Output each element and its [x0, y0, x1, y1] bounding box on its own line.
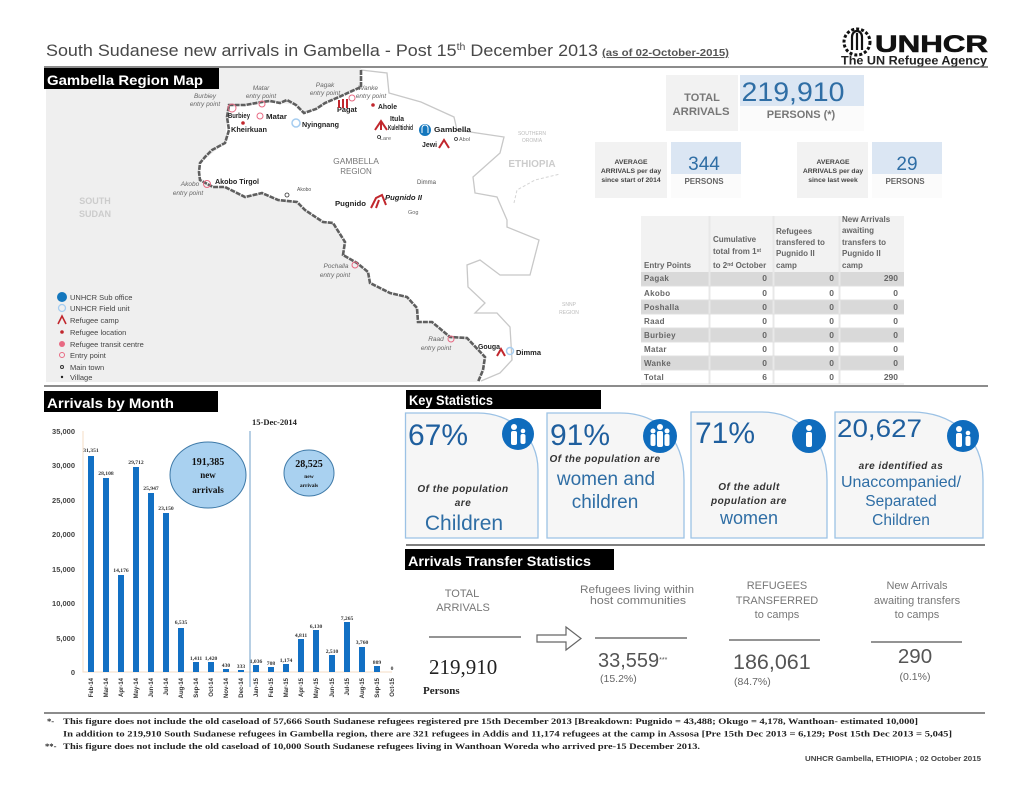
table: entry points: 0 — [829, 372, 834, 382]
transfer: total arrivals — [423, 588, 521, 697]
KPI: total arrivals — [666, 75, 864, 131]
bar chart: arrivals by month: 0 — [391, 666, 394, 672]
bar chart: arrivals by month: Oct-15 — [390, 677, 396, 697]
map legend — [57, 292, 144, 382]
stat card: 20,627 unaccompanied children: Unaccompanied/ — [841, 474, 962, 491]
bar chart: arrivals by month: 0 — [71, 668, 75, 677]
bar chart: arrivals by month: 1,036 — [250, 659, 262, 665]
transfer: new arrivals awaiting transfers: 290 — [898, 645, 932, 668]
map labels: entry point — [190, 101, 221, 108]
table: entry points: 0 — [762, 344, 767, 354]
bar chart: arrivals by month: 3,760 — [356, 640, 368, 646]
transfer: refugees transferred to camps — [729, 580, 820, 688]
bar chart: arrivals by month: 2,510 — [326, 649, 338, 655]
KPI: average arrivals since last week: AVERAGE — [816, 159, 850, 166]
bar chart: arrivals by month: 6,130 — [310, 624, 322, 630]
table: entry points: 0 — [829, 358, 834, 368]
table: entry points: Burbiey — [644, 331, 676, 340]
table: entry points: October — [733, 261, 766, 270]
bar chart: arrivals by month: May-15 — [314, 677, 320, 698]
table: entry points: 0 — [829, 273, 834, 283]
map labels: Akobo — [180, 181, 200, 188]
transfer: refugees transferred to camps: 186,061 — [733, 650, 811, 674]
stat card: 67% children: Of the population — [417, 484, 509, 495]
table: entry points: 0 — [893, 330, 898, 340]
KPI: total arrivals: PERSONS (*) — [767, 109, 836, 121]
stat card: 20,627 unaccompanied children: Separated — [865, 493, 937, 510]
map legend: Main town — [70, 363, 104, 372]
callout: 28,525 new arrivals: 28,525 — [295, 459, 323, 470]
map labels: OROMIA — [522, 138, 543, 144]
table: entry points: 0 — [893, 344, 898, 354]
bar chart: arrivals by month: May-14 — [134, 677, 140, 698]
map labels: Burbiey — [228, 111, 251, 120]
stat card: 71% women — [691, 412, 827, 538]
footnotes: **- — [45, 741, 57, 751]
bar chart: arrivals by month: Feb-15 — [269, 677, 275, 697]
map labels: Burbiey — [194, 93, 217, 100]
bar chart: arrivals by month: Jul-15 — [345, 677, 351, 695]
icon: family — [502, 418, 534, 450]
bar chart: arrivals by month: Jul-14 — [164, 677, 170, 695]
footnotes: *- — [47, 716, 54, 726]
KPI: total arrivals: TOTAL — [684, 92, 720, 104]
transfer: refugees transferred to camps: (84.7%) — [734, 676, 771, 688]
transfer: new arrivals awaiting transfers: awaiting transfers — [874, 595, 961, 607]
bar chart: arrivals by month: Sep-15 — [375, 677, 381, 698]
transfer: total arrivals: TOTAL — [445, 588, 479, 600]
table: entry points: Pagak — [644, 274, 669, 283]
stat card: 71% women: women — [719, 508, 778, 528]
table: entry points: transfers to — [842, 238, 886, 247]
credit line: UNHCR Gambella, ETHIOPIA ; 02 October 2015 — [805, 754, 981, 763]
table: entry points: 0 — [762, 330, 767, 340]
map labels — [79, 82, 579, 357]
table: entry points: Entry Points — [644, 261, 692, 270]
bar chart: arrivals by month: 29,712 — [128, 460, 144, 466]
map labels: entry point — [310, 90, 341, 97]
bar chart: arrivals by month: 7,265 — [341, 616, 353, 622]
bar chart: arrivals by month: Sep-14 — [194, 677, 200, 698]
bar chart: arrivals by month: 35,000 — [52, 427, 75, 436]
KPI: average arrivals since start of 2014: 344 — [688, 154, 720, 175]
transfer: refugees transferred to camps: to camps — [755, 609, 800, 621]
table: entry points: 0 — [893, 288, 898, 298]
KPI: average arrivals since start of 2014 — [595, 142, 741, 198]
map labels: Dimma — [516, 348, 542, 357]
bar chart: arrivals by month: 1,420 — [205, 656, 217, 662]
map labels: Wanke — [358, 85, 378, 92]
section heading: arrivals transfer statistics: Arrivals Transfer Statistics — [408, 553, 591, 569]
table: entry points: Poshalla — [644, 303, 680, 312]
section heading: arrivals by month: Arrivals by Month — [47, 395, 174, 411]
map labels: entry point — [421, 345, 452, 352]
table: entry points: 0 — [893, 316, 898, 326]
callout: 28,525 new arrivals: arrivals — [300, 483, 318, 489]
title — [46, 41, 729, 60]
transfer: refugees transferred to camps: TRANSFERRED — [736, 595, 818, 607]
map labels: Kheirkuan — [231, 125, 267, 134]
table: entry points: camp — [776, 261, 797, 270]
logo: UNHCR: The UN Refugee Agency — [841, 56, 988, 68]
map labels: Ahole — [378, 102, 397, 111]
table: entry points: Pugnido II — [842, 249, 881, 258]
bar chart: arrivals by month: Mar-15 — [284, 677, 290, 697]
map labels: entry point — [356, 93, 387, 100]
bar chart: arrivals by month: 4,811 — [295, 633, 307, 639]
international border — [199, 70, 485, 382]
KPI: average arrivals since start of 2014: ARRIVALS per day — [601, 168, 661, 175]
table: entry points: awaiting — [842, 226, 874, 235]
map labels: SNNP — [562, 302, 577, 308]
footnotes: This figure does not include the old caseload of 57,666 South Sudanese refugees registered pre 15th December 2013 [Breakdown: Pugnido = 43,488; Okugo = 4,178, Wanthoan- estimated 10,000] — [63, 716, 918, 726]
table: entry points: 0 — [762, 316, 767, 326]
stat card: 71% women: population are — [710, 496, 787, 507]
map labels: Raad — [428, 336, 444, 343]
bar chart: arrivals by month: 31,351 — [83, 448, 99, 454]
map labels: Gouga — [478, 342, 501, 351]
map labels: GAMBELLA — [333, 156, 379, 166]
bar chart: arrivals by month: 5,000 — [56, 634, 75, 643]
transfer: new arrivals awaiting transfers: New Arrivals — [886, 580, 948, 592]
stat card: 71% women: Of the adult — [718, 482, 780, 493]
bar chart: arrivals by month: Apr-14 — [119, 677, 125, 697]
map labels: Akobo — [297, 187, 311, 193]
bar chart: arrivals by month: 28,108 — [98, 471, 114, 477]
stat card: 67% children: are — [455, 498, 471, 509]
bar chart: arrivals by month: 15-Dec-2014 — [252, 417, 298, 427]
map legend: Refugee transit centre — [70, 340, 144, 349]
footnotes: In addition to 219,910 South Sudanese refugees in Gambella region, there are 321 refugees in Addis and 11,174 refugees at the camp in Assosa [Pre 15th Dec 2013 = 6,129; Post 15th Dec 2013 = 5,045] — [63, 728, 952, 738]
title: South Sudanese new arrivals in Gambella - Post 15 — [46, 41, 435, 60]
callout: 28,525 new arrivals — [284, 450, 334, 496]
map labels: Akobo Tirgol — [215, 177, 259, 186]
table: entry points: Raad — [644, 317, 665, 326]
table: entry points: camp — [842, 261, 863, 270]
bar chart: arrivals by month: Dec-14 — [239, 677, 245, 698]
arrow: transfer flow — [537, 627, 581, 650]
bar chart: arrivals by month: 10,000 — [52, 599, 75, 608]
Ethiopia regional outline — [361, 70, 539, 381]
map legend: Refugee camp — [70, 316, 119, 325]
icon: family group — [643, 419, 677, 453]
transfer: total arrivals: 219,910 — [429, 655, 497, 679]
bar chart: arrivals by month: Jan-15 — [254, 677, 260, 697]
map labels: SOUTH — [79, 196, 111, 206]
table: entry points: 0 — [829, 316, 834, 326]
bar chart: arrivals by month: Aug-14 — [179, 677, 185, 698]
stat card: 67% children: Children — [425, 512, 503, 535]
bar chart: arrivals by month — [52, 417, 396, 698]
table: entry points — [641, 215, 904, 384]
footnotes — [45, 716, 952, 751]
transfer: refugees transferred to camps: REFUGEES — [747, 580, 807, 592]
map labels: Pugnido — [335, 199, 366, 208]
transfer: new arrivals awaiting transfers: to camps — [895, 609, 940, 621]
callout: 191,385 new arrivals: arrivals — [192, 486, 224, 496]
map labels: SUDAN — [79, 209, 111, 219]
logo: UNHCR — [841, 29, 988, 68]
transfer: new arrivals awaiting transfers: (0.1%) — [900, 671, 930, 683]
transfer: total arrivals: Persons — [423, 685, 460, 697]
map labels: SOUTHERN — [518, 131, 546, 137]
map labels: Pugnido II — [385, 193, 423, 202]
map labels: entry point — [320, 272, 351, 279]
title: December 2013 — [465, 41, 598, 60]
section heading: map: Gambella Region Map — [47, 72, 203, 88]
bar chart: arrivals by month: 6,535 — [175, 620, 187, 626]
stat card: 91% women and children: women and — [556, 469, 655, 490]
footnotes: This figure does not include the old caseload of 10,000 South Sudanese refugees living in Wanthoan Woreda who arrived pre-15 December 2013. — [63, 741, 700, 751]
transfer: refugees within host communities: 33,559 — [598, 650, 659, 672]
map labels: Pagat — [337, 105, 357, 114]
map labels: Gog — [408, 210, 418, 216]
KPI: average arrivals since start of 2014: since start of 2014 — [601, 177, 661, 184]
stat card: 20,627 unaccompanied children: are identified as — [859, 461, 943, 472]
table: entry points: Refugees — [776, 227, 813, 236]
map labels: Abol — [459, 137, 470, 143]
KPI: average arrivals since last week — [797, 142, 942, 198]
bar chart: arrivals by month: Apr-15 — [299, 677, 305, 697]
transfer: refugees within host communities: *** — [659, 657, 668, 664]
map legend: Refugee location — [70, 328, 126, 337]
bar chart: arrivals by month: 1,174 — [280, 658, 292, 664]
KPI: average arrivals since start of 2014: PERSONS — [684, 177, 724, 186]
icon: woman — [792, 419, 826, 453]
KPI: total arrivals: 219,910 — [742, 77, 844, 107]
logo: UNHCR: UNHCR — [875, 31, 988, 58]
bar chart: arrivals by month: 25,947 — [143, 486, 159, 492]
stat card: 91% women and children: 91% — [550, 419, 610, 452]
icon: adult and child — [947, 420, 979, 452]
table: entry points: New Arrivals — [842, 215, 891, 224]
transfer: refugees within host communities: (15.2%) — [600, 673, 637, 685]
callout: 191,385 new arrivals: new — [200, 470, 216, 480]
table: entry points: Matar — [644, 345, 667, 354]
table: entry points: 0 — [762, 288, 767, 298]
callout: 191,385 new arrivals — [170, 442, 246, 508]
bar chart: arrivals by month: 20,000 — [52, 530, 75, 539]
map labels: Itula — [390, 114, 405, 123]
transfer: refugees within host communities: host communities — [590, 595, 687, 607]
stat card: 67% children: 67% — [408, 419, 468, 452]
South Sudan territory — [46, 68, 485, 382]
map markers — [204, 95, 514, 356]
map labels: entry point — [173, 190, 204, 197]
map legend: Entry point — [70, 351, 107, 360]
table: entry points: 0 — [893, 358, 898, 368]
bar chart: arrivals by month: 25,000 — [52, 496, 75, 505]
title: (as of 02-October-2015) — [602, 47, 729, 59]
table: entry points: 0 — [762, 302, 767, 312]
stat card: 67% children — [406, 413, 538, 538]
map labels: Pagak — [316, 82, 335, 89]
section heading: key statistics: Key Statistics — [409, 392, 493, 408]
table: entry points: transfered to — [776, 238, 825, 247]
table: entry points: nd — [727, 262, 733, 268]
table: entry points: Total — [644, 373, 664, 382]
bar chart: arrivals by month: Oct-14 — [209, 677, 215, 697]
stat card: 71% women: 71% — [695, 417, 755, 450]
section heading: key statistics — [406, 390, 601, 409]
bar chart: arrivals by month: 1,411 — [190, 656, 202, 662]
bar chart: arrivals by month: 14,176 — [113, 568, 129, 574]
transfer: refugees within host communities: Refugees living within — [580, 584, 694, 596]
transfer: new arrivals awaiting transfers — [871, 580, 962, 683]
table: entry points: 0 — [762, 273, 767, 283]
map legend: UNHCR Sub office — [70, 293, 132, 302]
callout: 28,525 new arrivals: new — [304, 474, 314, 480]
table: entry points: 290 — [884, 273, 898, 283]
table: entry points: to 2 — [713, 261, 727, 270]
table: entry points: Akobo — [644, 289, 670, 298]
callout: 191,385 new arrivals: 191,385 — [192, 457, 224, 468]
bar chart: arrivals by month: 430 — [222, 663, 230, 669]
section heading: arrivals by month — [44, 391, 218, 412]
map labels: Gambella — [434, 125, 472, 134]
table: entry points: total from 1 — [713, 247, 757, 256]
map labels: Nyingnang — [302, 120, 339, 129]
bar chart: arrivals by month: 809 — [373, 660, 381, 666]
map labels: REGION — [559, 310, 579, 316]
bar chart: arrivals by month: 23,150 — [158, 506, 174, 512]
map labels: Pochalla — [324, 263, 349, 270]
bar chart: arrivals by month: Aug-15 — [360, 677, 366, 698]
stat card: 20,627 unaccompanied children — [835, 412, 983, 538]
table: entry points: 0 — [762, 358, 767, 368]
KPI: average arrivals since last week: 29 — [896, 154, 918, 175]
section heading: map — [44, 68, 219, 89]
bar chart: arrivals by month: Feb-14 — [89, 677, 95, 697]
bar chart: arrivals by month: Jun-14 — [149, 677, 155, 697]
map labels: Matar — [266, 112, 287, 121]
bar chart: arrivals by month: 333 — [237, 664, 245, 670]
stat card: 91% women and children — [547, 413, 684, 538]
map labels: Matar — [253, 85, 270, 92]
bar chart: arrivals by month: 15,000 — [52, 565, 75, 574]
KPI: total arrivals: ARRIVALS — [672, 106, 730, 118]
table: entry points: Cumulative — [713, 235, 757, 244]
KPI: average arrivals since start of 2014: AVERAGE — [614, 159, 648, 166]
bar chart: arrivals by month: 708 — [267, 661, 275, 667]
section heading: arrivals transfer statistics — [405, 549, 614, 570]
table: entry points: 0 — [829, 330, 834, 340]
table: entry points: 6 — [762, 372, 767, 382]
map labels: Kule/Itichid — [388, 123, 413, 132]
table: entry points: 0 — [829, 344, 834, 354]
bar chart: arrivals by month: Mar-14 — [104, 677, 110, 697]
table: entry points: 0 — [829, 302, 834, 312]
table: entry points: Pugnido II — [776, 249, 815, 258]
table: entry points: 0 — [893, 302, 898, 312]
map labels: Jewi — [422, 140, 437, 149]
stat card: 20,627 unaccompanied children: Children — [872, 512, 930, 529]
map legend: UNHCR Field unit — [70, 304, 131, 313]
KPI: average arrivals since last week: since last week — [808, 177, 858, 184]
table: entry points: st — [757, 248, 761, 254]
transfer: refugees within host communities — [580, 584, 694, 685]
map labels: Lare — [380, 136, 391, 142]
transfer: total arrivals: ARRIVALS — [436, 602, 490, 614]
internal boundary — [514, 174, 560, 203]
stat card: 91% women and children: Of the population are — [550, 454, 660, 465]
map labels: entry point — [246, 93, 277, 100]
KPI: average arrivals since last week: ARRIVALS per day — [803, 168, 863, 175]
table: entry points: Wanke — [644, 359, 671, 368]
bar chart: arrivals by month: Jun-15 — [330, 677, 336, 697]
title: th — [457, 42, 465, 53]
map legend: Village — [70, 373, 92, 382]
bar chart: arrivals by month: Nov-14 — [224, 677, 230, 698]
table: entry points: 290 — [884, 372, 898, 382]
map labels: REGION — [340, 167, 372, 176]
map labels: ETHIOPIA — [508, 159, 556, 170]
table: entry points: 0 — [829, 288, 834, 298]
stat card: 20,627 unaccompanied children: 20,627 — [837, 415, 922, 443]
KPI: average arrivals since last week: PERSONS — [885, 177, 925, 186]
stat card: 91% women and children: children — [572, 492, 638, 513]
map labels: Dimma — [417, 180, 437, 186]
panel: Gambella region map — [44, 68, 579, 382]
bar chart: arrivals by month: 30,000 — [52, 461, 75, 470]
